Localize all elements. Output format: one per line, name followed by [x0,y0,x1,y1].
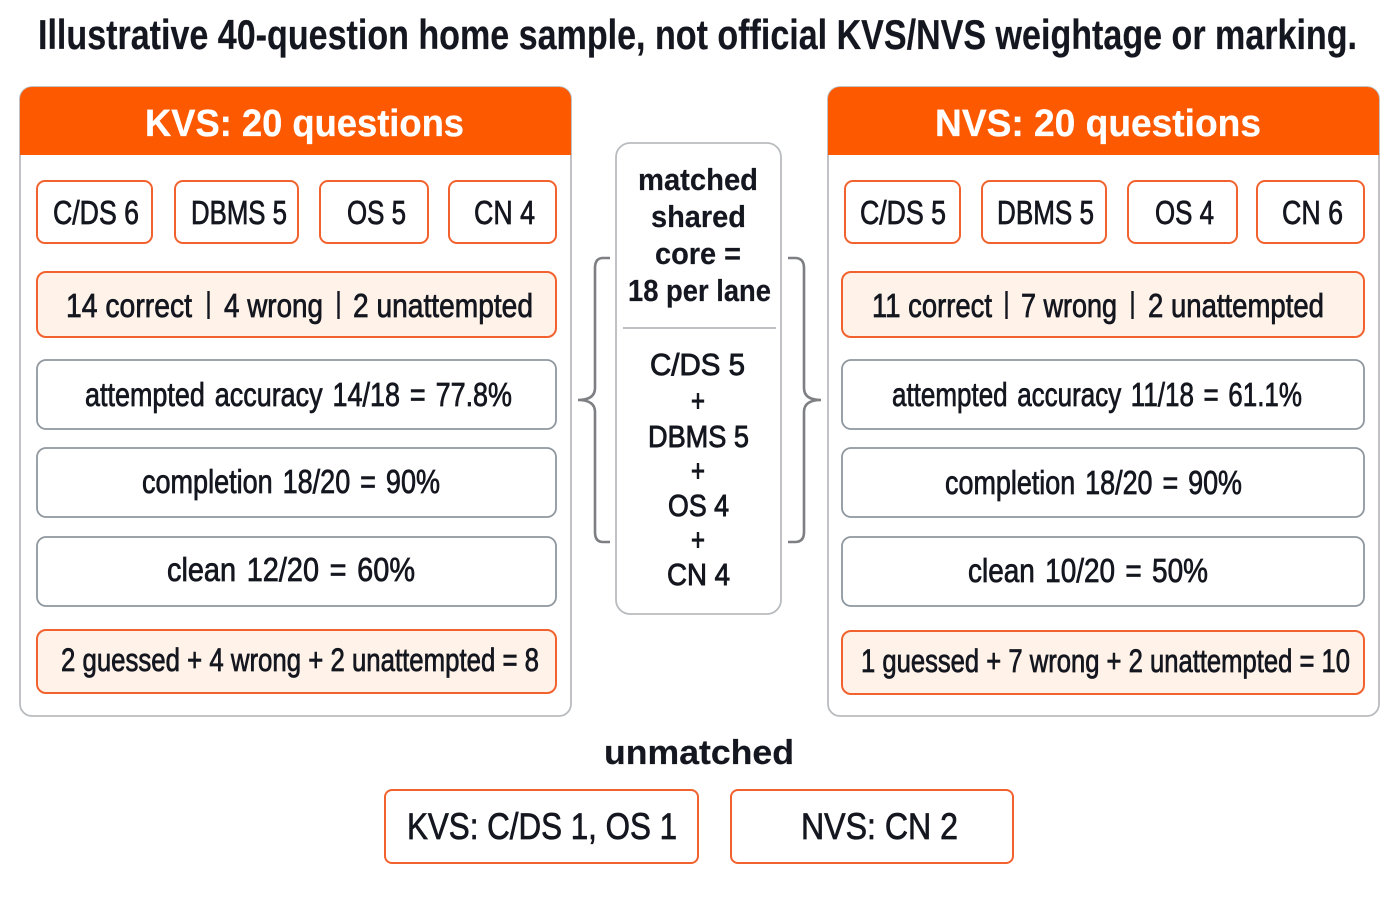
KVS outcome counts: 2 unattempted [353,287,533,324]
KVS chip: C/DS [37,181,152,243]
NVS attempted accuracy: attempted accuracy 11/18 = 61.1% [892,376,1302,413]
panel: NVS [828,87,1379,716]
NVS outcome counts [842,272,1364,337]
KVS clean [37,537,556,606]
NVS outcome counts: 2 unattempted [1148,287,1324,324]
KVS attempted accuracy [37,360,556,429]
core lanes [648,347,749,592]
KVS attempted accuracy: attempted accuracy 14/18 = 77.8% [85,376,512,413]
NVS chip: OS [1128,181,1237,243]
KVS chip: C/DS: C/DS 6 [53,194,139,231]
KVS completion: completion 18/20 = 90% [142,463,440,500]
unmatched label: unmatched [604,734,794,772]
NVS completion: completion 18/20 = 90% [945,464,1242,501]
unmatched: NVS [731,790,1013,863]
panel: matched shared core [616,143,781,614]
core heading: 18 per lane [628,273,771,308]
core lanes: + [691,522,705,557]
KVS chip: CN [449,181,556,243]
KVS header: KVS: 20 questions [145,103,464,145]
unmatched: NVS: NVS: CN 2 [801,806,958,847]
NVS clean: clean 10/20 = 50% [968,552,1208,589]
left brace [578,258,610,542]
KVS loss sum [37,630,556,693]
NVS chip: CN [1257,181,1364,243]
NVS header [828,87,1379,155]
KVS completion [37,448,556,517]
core lanes: OS 4 [668,488,729,523]
core heading: shared [651,199,746,234]
core lanes: C/DS 5 [650,347,745,382]
KVS chip: DBMS [175,181,298,243]
NVS header: NVS: 20 questions [935,103,1261,145]
NVS chip: DBMS: DBMS 5 [997,194,1094,231]
NVS attempted accuracy [842,360,1364,429]
core heading: matched [638,162,758,197]
NVS chip: C/DS [845,181,960,243]
KVS outcome counts [37,272,556,337]
KVS loss sum: 2 guessed + 4 wrong + 2 unattempted = 8 [61,642,539,678]
NVS clean [842,537,1364,606]
KVS outcome counts: 14 correct [66,287,192,324]
KVS chip: CN: CN 4 [474,194,535,231]
NVS completion [842,448,1364,517]
KVS header [20,87,571,155]
KVS chip: OS [320,181,428,243]
NVS outcome counts: 11 correct [872,287,992,324]
NVS loss sum [842,631,1364,694]
NVS chip: DBMS [982,181,1106,243]
panel: KVS [20,87,571,716]
right brace [788,258,821,542]
NVS chip: C/DS: C/DS 5 [860,194,946,231]
KVS chip: DBMS: DBMS 5 [191,194,287,231]
unmatched: KVS [385,790,698,863]
NVS outcome counts: 7 wrong [1021,287,1117,324]
KVS clean: clean 12/20 = 60% [167,551,415,588]
unmatched: KVS: KVS: C/DS 1, OS 1 [407,806,677,847]
core lanes: CN 4 [667,557,730,592]
KVS chip: OS: OS 5 [347,194,406,231]
KVS outcome counts: 4 wrong [224,287,323,324]
NVS chip: OS: OS 4 [1155,194,1214,231]
NVS chip: CN: CN 6 [1282,194,1343,231]
core lanes: + [691,453,705,488]
core lanes: DBMS 5 [648,419,749,454]
core heading [628,162,771,308]
core lanes: + [691,383,705,418]
core heading: core = [655,236,741,271]
